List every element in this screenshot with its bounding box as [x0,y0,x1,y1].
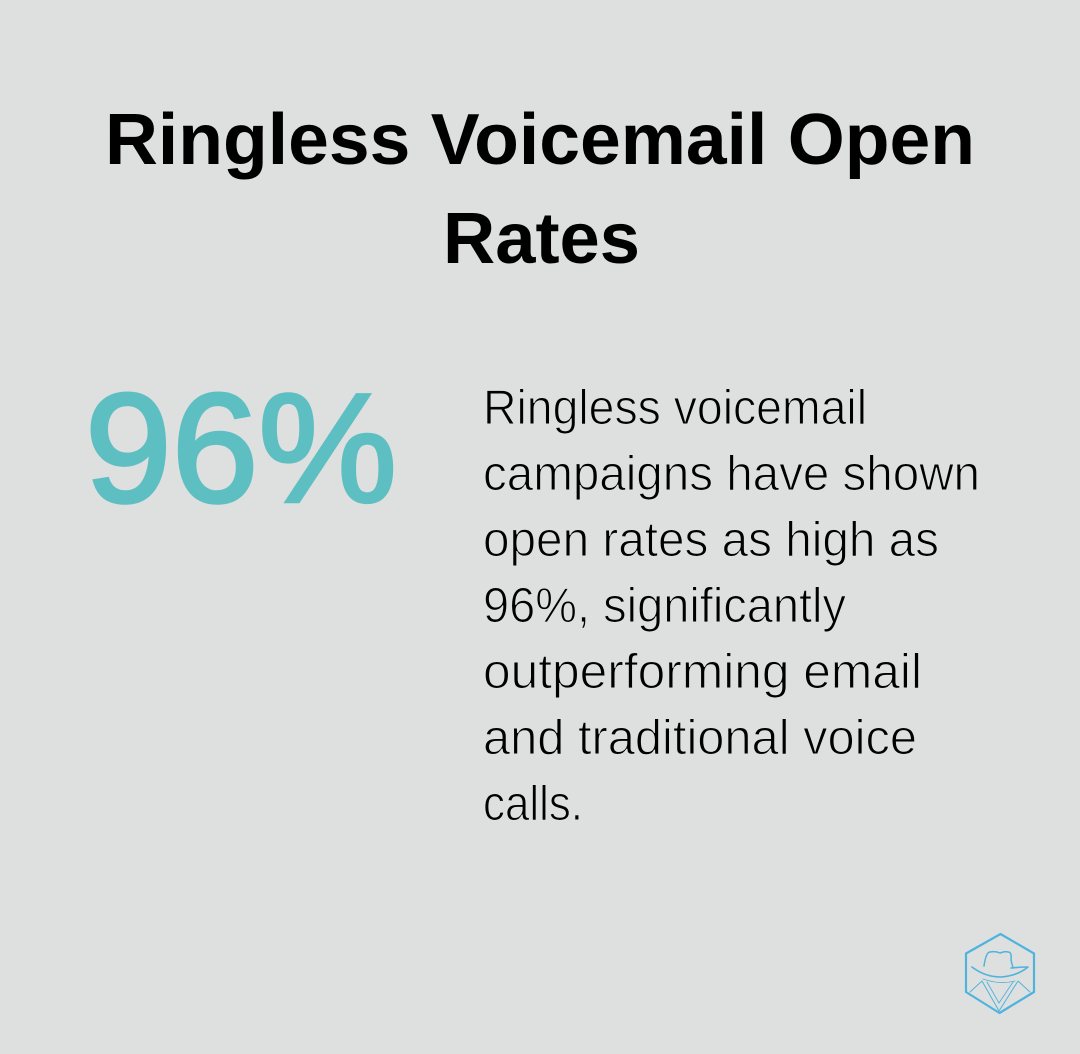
title: Rates [443,199,640,279]
description text block: 96%, significantly [483,578,846,633]
title: Ringless Voicemail Open [105,100,975,180]
icon: hexagon logo with spy hat [966,934,1034,1013]
description text block: and traditional voice [483,710,917,765]
description text block: campaigns have shown [483,446,980,501]
description text block: calls. [483,776,583,831]
title [105,100,975,279]
description text block: Ringless voicemail [483,380,867,435]
description text block: open rates as high as [483,512,939,567]
description text block [483,380,980,831]
big statistic: 96%: 96% [85,362,397,534]
description text block: outperforming email [483,644,922,699]
